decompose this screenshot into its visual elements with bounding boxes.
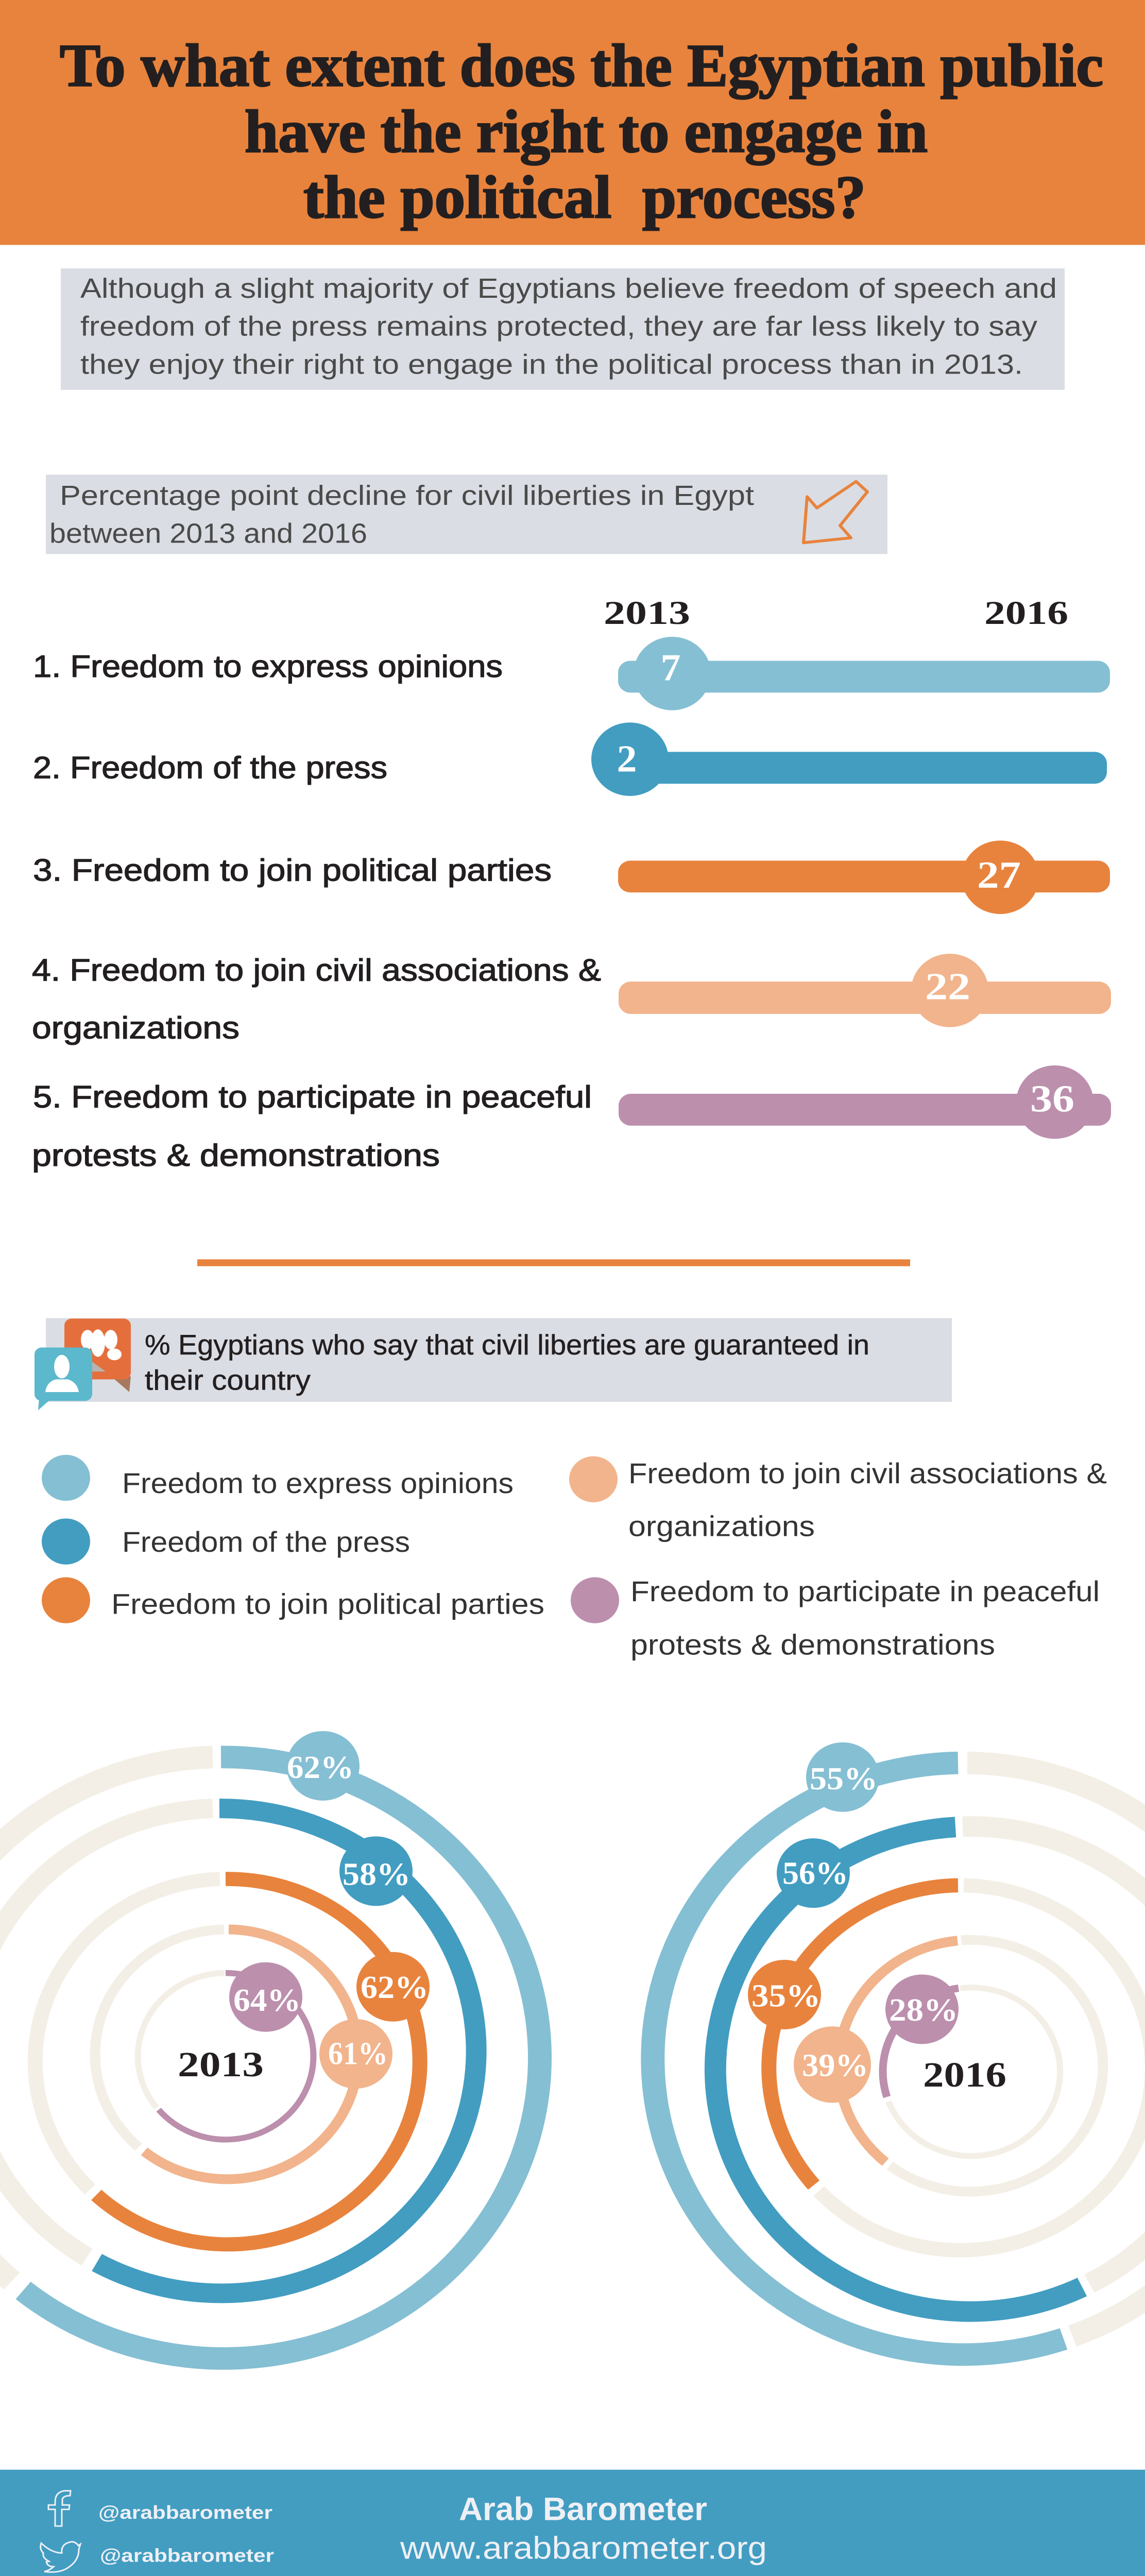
ring: freedom to join political parties 35%: 35%	[751, 1978, 821, 2013]
ring: freedom to join civil associations 39%: 39%	[802, 2047, 868, 2083]
section heading: civil liberties guaranteed: their country	[145, 1364, 311, 1396]
row 5: freedom to participate in peaceful protests: 5. Freedom to participate in peaceful	[33, 1080, 592, 1114]
organisation name: Arab Barometer	[459, 2491, 707, 2527]
year label 2013: 2013	[178, 2045, 264, 2084]
legend: freedom to participate in peaceful protests: protests & demonstrations	[630, 1629, 995, 1661]
icon: facebook	[48, 2491, 71, 2526]
twitter handle: @arabbarometer	[100, 2545, 274, 2566]
ring: freedom to express opinions 55%: 55%	[810, 1761, 878, 1797]
title: the political process?	[303, 164, 866, 231]
title: To what extent does the Egyptian public	[60, 32, 1103, 99]
row 1: freedom to express opinions	[33, 637, 1110, 710]
legend: freedom to express opinions: Freedom to express opinions	[122, 1467, 514, 1500]
row 4: freedom to join civil associations	[32, 953, 1111, 1045]
ring: freedom to join civil associations 39%	[794, 1940, 1103, 2192]
ring: freedom of the press 56%: 56%	[782, 1855, 848, 1891]
legend: freedom to join political parties	[42, 1577, 544, 1623]
section heading: percentage point decline	[46, 474, 887, 554]
intro text box: they enjoy their right to engage in the political process than in 2013.	[80, 349, 1023, 380]
ring: freedom to express opinions 62%: 62%	[287, 1750, 354, 1785]
radial chart: 2013	[0, 1731, 540, 2359]
ring: freedom to express opinions 55%	[653, 1742, 1145, 2354]
decline chart	[32, 595, 1111, 1173]
row 4: freedom to join civil associations: 22	[925, 965, 970, 1008]
ring: freedom of the press 58%	[0, 1808, 476, 2293]
ring: freedom to participate in peaceful protests 28%: 28%	[889, 1992, 958, 2027]
legend	[42, 1455, 1107, 1661]
radial chart: 2016	[653, 1742, 1145, 2354]
website: www.arabbarometer.org	[400, 2531, 767, 2566]
year label 2016: 2016	[923, 2056, 1006, 2095]
ring: freedom of the press 58%: 58%	[343, 1856, 411, 1892]
icon: down-left arrow	[804, 482, 867, 543]
legend: freedom to join civil associations: Freedom to join civil associations &	[628, 1458, 1107, 1490]
ring: freedom to participate in peaceful protests 64%	[138, 1962, 313, 2140]
legend: freedom to join civil associations	[569, 1456, 1107, 1543]
section heading: percentage point decline: Percentage point decline for civil liberties in Egypt	[60, 480, 755, 511]
legend: freedom to participate in peaceful protests	[571, 1575, 1100, 1661]
row 4: freedom to join civil associations: organizations	[32, 1011, 240, 1045]
header banner	[0, 0, 1145, 245]
row 2: freedom of the press: 2	[617, 738, 637, 780]
legend: freedom to join civil associations: organizations	[628, 1511, 815, 1543]
ring: freedom to join political parties 62%	[35, 1879, 430, 2244]
ring: freedom of the press 56%	[715, 1826, 1145, 2312]
row 1: freedom to express opinions: 7	[661, 647, 680, 689]
section heading: civil liberties guaranteed: % Egyptians who say that civil liberties are guaranteed in	[145, 1329, 869, 1361]
year labels	[604, 595, 1068, 632]
ring: freedom to join political parties 35%	[748, 1885, 1145, 2250]
row 3: freedom to join political parties: 27	[977, 854, 1021, 896]
ring: freedom to join civil associations 61%	[95, 1929, 392, 2179]
row 3: freedom to join political parties	[33, 840, 1110, 914]
year labels: 2016	[984, 595, 1068, 632]
facebook handle: @arabbarometer	[98, 2502, 272, 2523]
row 1: freedom to express opinions: 1. Freedom to express opinions	[33, 649, 503, 684]
footer	[0, 2470, 1145, 2576]
row 5: freedom to participate in peaceful protests	[32, 1065, 1111, 1173]
legend: freedom of the press: Freedom of the press	[122, 1526, 410, 1558]
ring: freedom to join political parties 62%: 62%	[361, 1970, 429, 2005]
row 5: freedom to participate in peaceful protests: 36	[1030, 1078, 1074, 1120]
ring: freedom to join civil associations 61%: 61%	[328, 2036, 388, 2071]
intro text box: Although a slight majority of Egyptians believe freedom of speech and	[80, 273, 1057, 304]
row 4: freedom to join civil associations: 4. Freedom to join civil associations &	[32, 953, 601, 988]
intro text box: freedom of the press remains protected, they are far less likely to say	[80, 311, 1037, 342]
row 3: freedom to join political parties: 3. Freedom to join political parties	[33, 853, 552, 888]
ring: freedom to express opinions 62%	[0, 1731, 540, 2359]
row 5: freedom to participate in peaceful protests: protests & demonstrations	[32, 1138, 440, 1173]
title	[60, 32, 1103, 231]
section heading: percentage point decline: between 2013 and 2016	[49, 518, 367, 549]
year labels: 2013	[604, 595, 690, 632]
legend: freedom to participate in peaceful protests: Freedom to participate in peaceful	[630, 1575, 1100, 1608]
ring: freedom to participate in peaceful protests 64%: 64%	[233, 1982, 301, 2018]
ring: freedom to participate in peaceful protests 28%	[883, 1974, 1060, 2156]
legend: freedom to join political parties: Freedom to join political parties	[111, 1588, 544, 1620]
title: have the right to engage in	[245, 98, 928, 165]
legend: freedom of the press	[42, 1518, 410, 1565]
row 2: freedom of the press: 2. Freedom of the press	[33, 751, 387, 785]
intro text box	[61, 268, 1065, 390]
icon: speech bubbles with people	[35, 1318, 131, 1410]
icon: twitter	[41, 2541, 80, 2572]
section heading: civil liberties guaranteed	[35, 1318, 952, 1410]
legend: freedom to express opinions	[42, 1455, 514, 1501]
row 2: freedom of the press	[33, 722, 1107, 796]
